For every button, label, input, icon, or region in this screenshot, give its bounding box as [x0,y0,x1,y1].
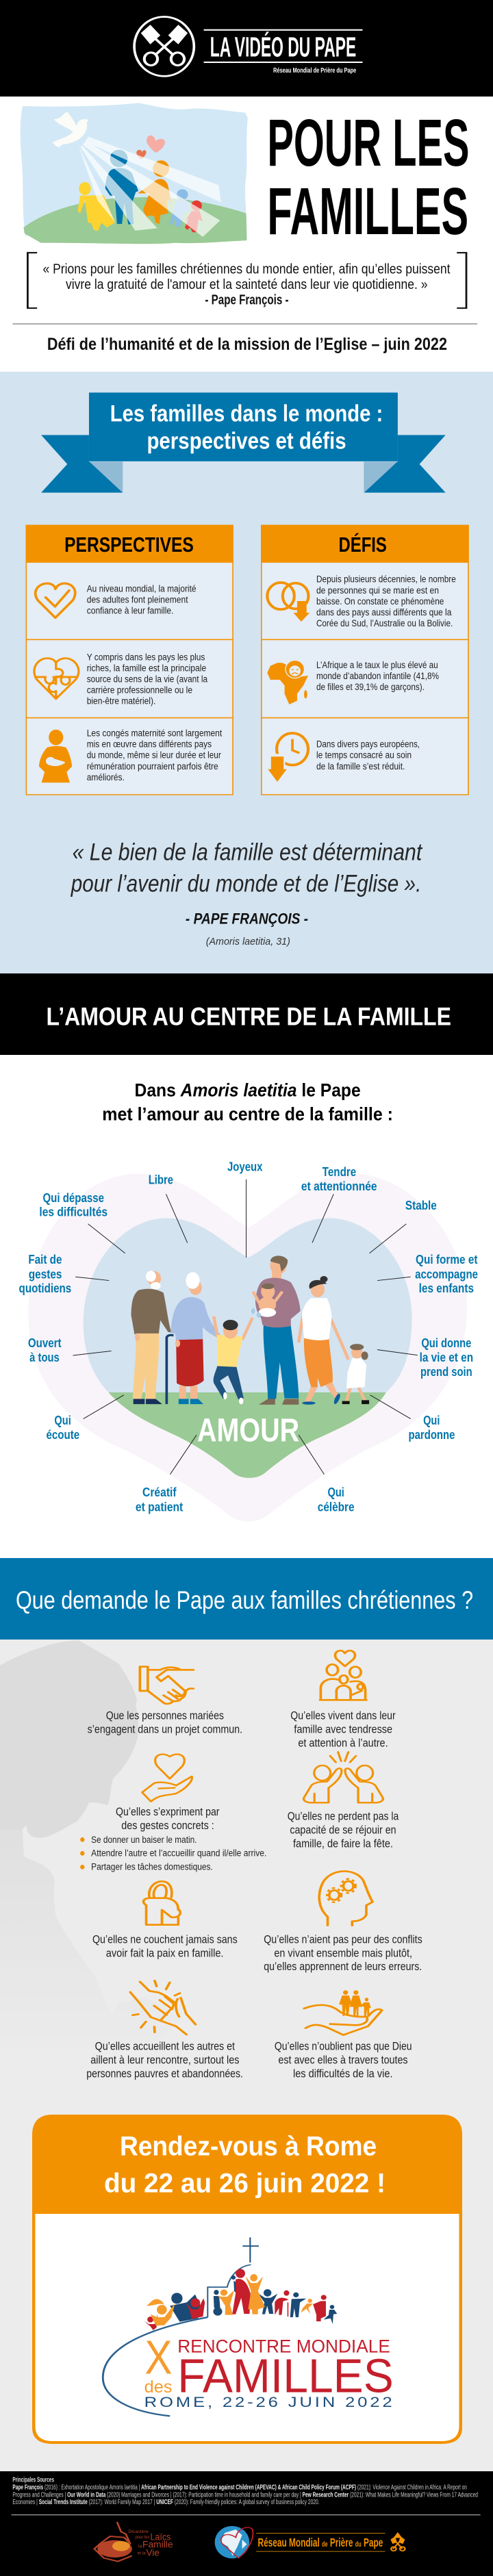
logo: Pope's prayer network: Réseau Mondial de Prière du Pape [258,2536,383,2549]
list of gestures: Partager les tâches domestiques. [91,1861,213,1872]
request: shared project: s’engagent dans un projet commun. [88,1724,242,1736]
logo: crossed keys [134,16,194,76]
request: God is with them: les difficultés de la vie. [293,2067,393,2080]
request: tenderness: Qu’elles vivent dans leur [290,1710,396,1722]
text: meaning: riches, la famille est la principale [87,663,206,674]
qualities of love labels: et attentionnée [301,1180,377,1193]
request: learn from conflicts [264,1871,422,1973]
qualities of love labels: Stable [405,1199,437,1213]
text: child abandonment: de filles et 39,1% de garçons). [316,683,425,693]
text: maternity leave: Les congés maternité sont largement [87,728,222,739]
figure: grandmother [166,1272,222,1404]
text: marriage decline: de personnes qui se marie est en [316,586,439,596]
qualities of love labels: Qui [54,1414,71,1428]
qualities of love labels: Fait de [28,1253,62,1267]
qualities of love labels: Joyeux [227,1160,263,1174]
text: trust [87,584,197,616]
logo text: des [144,2377,172,2396]
icon: family in hand [304,1990,382,2035]
sources: Principales Sources [12,2476,54,2484]
text: trust: confiance à leur famille. [87,606,173,616]
logo: Dicastery [94,2522,173,2562]
request: shared project: Que les personnes mariées [106,1710,224,1722]
logo text: FAMILLES [177,2349,394,2403]
callout: Rome meeting [32,2115,462,2444]
request: celebrate: capacité de se réjouir en [290,1824,396,1837]
icon: rings with down arrow [267,583,309,622]
icon: heart with check [36,583,75,617]
request: celebrate: famille, de faire la fête. [293,1837,393,1850]
icon: hearts [136,136,165,159]
request: learn from conflicts: en vivant ensemble mais plutôt, [274,1947,412,1959]
logo: Dicastery: Vie [147,2547,160,2558]
pull quote: (Amoris laetitia, 31) [206,936,290,947]
text: marriage decline: baisse. On constate ce phénomène [316,597,444,607]
request: God is with them [275,1990,412,2080]
text: child abandonment: monde d’abandon infantile (41,8% [316,672,439,682]
logo: wordmark: Réseau Mondial de Prière du Pape [273,66,356,75]
qualities of love labels: les difficultés [39,1206,108,1219]
icon: puzzle heart [34,659,79,699]
icon: heart in hand [142,1755,192,1802]
icon: embrace [144,1881,180,1925]
request: make peace: avoir fait la paix en famille. [106,1947,223,1959]
prayer quote [27,253,466,308]
request: concrete gestures: Qu’elles s’expriment par [116,1806,220,1818]
qualities of love labels: à tous [29,1351,60,1365]
logo text: RENCONTRE MONDIALE [177,2336,390,2357]
text: marriage decline: Corée du Sud, l’Australie ou la Bolivie. [316,619,453,629]
text: meaning: carrière professionnelle ou le [87,685,192,696]
silhouette of the Pope [0,1640,183,2061]
diagram: heart of love [19,1160,478,1521]
icon: high five [303,1752,383,1802]
icon: Africa with crying child [267,660,308,704]
logo text: ROME, 22-26 JUIN 2022 [144,2394,392,2410]
icon: handshake [140,1667,193,1704]
light rays [79,137,221,237]
panel: challenges [261,525,469,795]
text: time for care: de la famille s’est réduit. [316,762,405,772]
list of gestures: Attendre l’autre et l’accueillir quand il/elle arrive. [91,1848,266,1859]
logo: World Meeting of Families [103,2237,394,2416]
qualities of love labels [19,1160,478,1514]
request: welcome others: aillent à leur rencontre, surtout les [90,2054,239,2066]
logo text [144,2330,394,2410]
heading: Amoris laetitia: Dans Amoris laetitia le Pape [135,1080,361,1100]
text: meaning: Y compris dans les pays les plus [87,652,205,663]
logo: wordmark [204,29,362,75]
text: child abandonment: L’Afrique a le taux le plus élevé au [316,661,438,671]
logo: Dicastery: Dicastère [128,2529,149,2534]
request: celebrate [288,1752,399,1850]
footer [0,2471,493,2576]
request: shared project [88,1667,242,1736]
prayer quote: - Pape François - [205,292,289,307]
request: tenderness [290,1650,396,1749]
section: families in the world [0,372,493,973]
qualities of love labels: Qui [423,1414,440,1428]
request: concrete gestures: des gestes concrets : [121,1820,214,1832]
title [267,106,470,248]
illustration: family under dove [21,103,248,244]
section: requests background [0,1640,493,2471]
text: maternity leave: mis en œuvre dans différents pays [87,739,212,750]
figure: boy [214,1316,253,1405]
text: maternity leave: du monde, même si leur durée et leur [87,750,221,761]
icon: clock with down arrow [266,733,308,782]
heading: Amoris laetitia [102,1080,393,1124]
callout heading: Rendez-vous à Rome [120,2131,377,2162]
icon: small keys [391,2534,405,2551]
qualities of love labels: Qui [327,1486,344,1500]
logo people [144,2269,337,2330]
qualities of love labels: pardonne [409,1429,455,1442]
qualities of love labels: gestes [29,1268,62,1281]
text: maternity leave: améliorés. [87,773,125,783]
qualities of love labels: quotidiens [19,1282,71,1296]
qualities of love labels: célèbre [318,1501,355,1514]
request: welcome others: Qu’elles accueillent les autres et [95,2041,235,2053]
pull quote [70,839,423,947]
request: welcome others: personnes pauvres et abandonnées. [86,2067,243,2080]
text: trust: des adultes font pleinement [87,595,188,605]
band: love at the centre [0,973,493,1055]
icon: family with heart [320,1650,366,1700]
list of gestures: Se donner un baiser le matin. [91,1835,197,1845]
text: meaning [87,652,208,706]
text: meaning: bien-être matériel). [87,696,155,706]
request: make peace [92,1881,238,1959]
qualities of love labels: Ouvert [28,1337,62,1351]
icon: dove [52,112,88,147]
outer heart [28,1173,467,1521]
ribbon heading [41,392,446,493]
text: marriage decline [316,574,456,629]
request: tenderness: et attention à l’autre. [298,1737,388,1749]
request: tenderness: famille avec tendresse [294,1724,392,1736]
figure: father with baby [251,1255,301,1405]
logo: Dicastery: pour les [135,2534,150,2540]
logo: Dicastery: Laïcs [150,2532,170,2542]
text: trust: Au niveau mondial, la majorité [87,584,197,594]
panel: perspectives: PERSPECTIVES [64,533,194,557]
list of gestures [80,1835,266,1872]
figure: grandfather [131,1271,171,1404]
callout heading: du 22 au 26 juin 2022 ! [104,2168,385,2199]
text: maternity leave [87,728,222,783]
pull quote: - PAPE FRANÇOIS - [186,910,308,927]
inner heart ground [108,1392,386,1478]
qualities of love labels: Qui dépasse [42,1191,104,1205]
label: AMOUR: AMOUR [197,1412,299,1449]
text: marriage decline: dans des pays aussi différents que la [316,608,452,618]
logo: Pope's prayer network [215,2526,405,2558]
connector lines [73,1179,418,1475]
text: maternity leave: rémunération pourraient parfois être [87,762,218,772]
logo: Dicastery: la [138,2544,142,2549]
header band [0,0,493,97]
request: celebrate: Qu’elles ne perdent pas la [288,1811,399,1823]
text: time for care [316,739,420,772]
icon: mother with baby [39,730,72,782]
qualities of love labels: écoute [47,1429,79,1442]
qualities of love labels: Tendre [323,1165,356,1179]
text: time for care: le temps consacré au soin [316,750,412,761]
icon: helping hands [130,1980,196,2035]
logo: Dicastery: et la [138,2551,146,2555]
logo text: X [144,2330,172,2384]
text: child abandonment [316,661,439,693]
request: God is with them: est avec elles à travers toutes [278,2054,408,2066]
panel: perspectives [26,525,233,795]
request: welcome others [86,1980,243,2080]
request: make peace: Qu’elles ne couchent jamais sans [92,1933,238,1946]
qualities of love labels: et patient [136,1501,183,1514]
panel: challenges: DÉFIS [339,533,387,557]
ribbon heading: Les familles dans le monde : [110,400,383,426]
figures [77,150,203,232]
ribbon heading: perspectives et défis [147,428,346,454]
callout heading [104,2131,385,2199]
icon: head with gears [319,1871,372,1926]
band: what the Pope asks [0,1558,493,1640]
sources [12,2476,481,2515]
figure: mother [299,1276,349,1405]
logo: Dicastery: Famille [142,2539,173,2550]
inner heart sky [84,1218,412,1392]
qualities of love labels: Libre [149,1173,173,1187]
sources: Economies | Social Trends Institute (2017): World Family Map 2017 | UNICEF (2020): Family-friendly policies: A global survey of business policy 2020. [12,2499,320,2505]
figure: girl [342,1344,369,1404]
request: concrete gestures [80,1755,266,1872]
text: meaning: source du sens de la vie (avant la [87,674,208,685]
text: time for care: Dans divers pays européens, [316,739,420,750]
qualities of love labels: Créatif [142,1486,177,1500]
